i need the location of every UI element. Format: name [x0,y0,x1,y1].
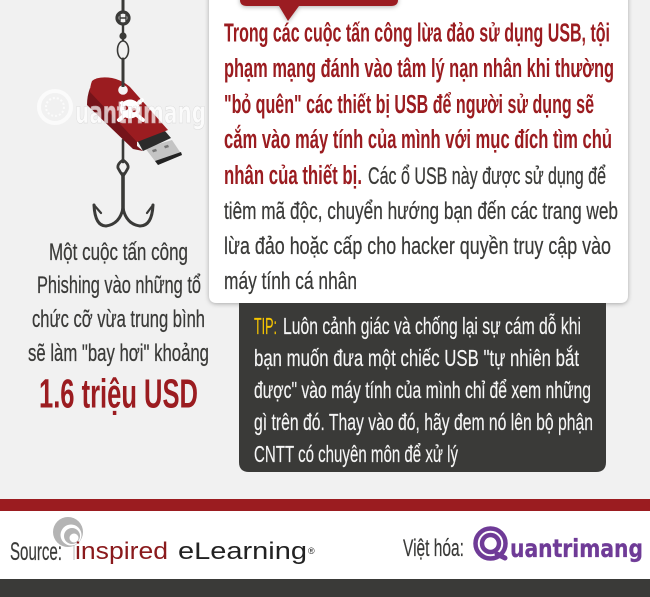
footer red bar [0,499,650,511]
source credit: Source: [10,538,62,566]
source credit: eLearning [178,538,307,565]
source credit: ® [308,546,315,556]
cost figure: 1.6 triệu USD [39,370,198,416]
footer dark bar [0,579,650,597]
translation credit [403,528,643,563]
callout pointer [240,0,398,21]
text block: phishing cost: sẽ làm "bay hơi" khoảng [28,340,209,367]
text block: phishing cost: chức cỡ vừa trung bình [32,306,205,333]
footer band [0,511,650,579]
text block: explanation: máy tính cá nhân [224,268,357,295]
tip text: CNTT có chuyên môn để xử lý [254,441,458,467]
panel: USB explanation card [209,0,628,303]
panel: tip box [239,303,606,472]
text block: highlighted warning: nhân của thiết bị. [224,162,362,190]
watermark: uantrimang [75,96,206,131]
tip text [254,313,593,467]
watermark [39,91,206,131]
logo: Quantrimang [476,528,643,563]
text block: phishing cost: Phishing vào những tổ [37,272,201,299]
tip label: TIP: [254,313,277,339]
translation credit: Việt hóa: [403,535,464,562]
text block: highlighted warning [224,20,614,190]
text block: phishing cost [28,239,209,416]
icon: USB drive on fishing hook [87,0,182,226]
source credit [10,517,315,566]
text block: phishing cost: Một cuộc tấn công [49,239,188,266]
source credit: inspired [75,538,168,565]
text block: explanation [224,163,618,295]
